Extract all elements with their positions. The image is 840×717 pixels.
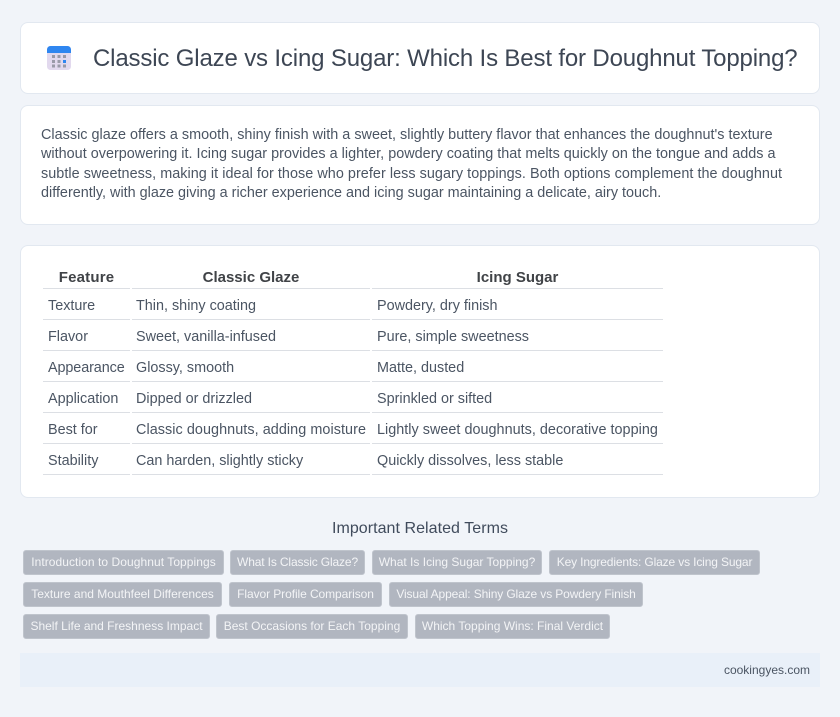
panel: header xyxy=(20,22,820,94)
tag: What Is Classic Glaze? xyxy=(237,555,358,569)
table row: best for: Classic doughnuts, adding moisture xyxy=(136,422,366,438)
table row: stability: Quickly dissolves, less stable xyxy=(377,453,563,469)
tag: Key Ingredients: Glaze vs Icing Sugar xyxy=(557,555,752,569)
tag xyxy=(372,550,542,575)
panel: description xyxy=(20,105,820,225)
tag: Which Topping Wins: Final Verdict xyxy=(422,619,603,633)
table row: flavor xyxy=(48,329,529,345)
table row: appearance: Glossy, smooth xyxy=(136,360,234,376)
text block: description: without overpowering it. Icing sugar provides a lighter, powdery coating that melts quickly on the tongue and adds a xyxy=(41,146,776,162)
title: Classic Glaze vs Icing Sugar: Which Is Best for Doughnut Topping? xyxy=(93,45,798,72)
table header: icing sugar: Icing Sugar xyxy=(477,269,558,286)
table row: texture: Powdery, dry finish xyxy=(377,298,498,314)
table row: texture: Thin, shiny coating xyxy=(136,298,256,314)
table row: application: Dipped or drizzled xyxy=(136,391,252,407)
table row: texture xyxy=(48,298,498,314)
tag: Flavor Profile Comparison xyxy=(237,587,374,601)
panel: comparison table xyxy=(20,245,820,498)
table row: best for: Lightly sweet doughnuts, decorative topping xyxy=(377,422,658,438)
tag xyxy=(389,582,643,607)
text block: description: Classic glaze offers a smooth, shiny finish with a sweet, slightly buttery flavor that enhances the doughnut's texture xyxy=(41,127,773,143)
table row: texture: Texture xyxy=(48,298,95,314)
table row: appearance xyxy=(48,360,464,376)
table row: best for xyxy=(48,422,658,438)
table row: flavor: Pure, simple sweetness xyxy=(377,329,529,345)
tag xyxy=(23,582,222,607)
heading: related terms: Important Related Terms xyxy=(332,520,508,537)
table row: flavor: Sweet, vanilla-infused xyxy=(136,329,276,345)
table row: stability xyxy=(48,453,563,469)
text block: description: differently, with glaze giving a richer experience and icing sugar maintaining a delicate, airy touch. xyxy=(41,185,661,201)
table row: application: Sprinkled or sifted xyxy=(377,391,492,407)
tag xyxy=(229,582,382,607)
tag: What Is Icing Sugar Topping? xyxy=(379,555,535,569)
icon: calendar xyxy=(47,46,71,70)
table header: feature: Feature xyxy=(59,269,114,286)
table row: application: Application xyxy=(48,391,118,407)
tag: Best Occasions for Each Topping xyxy=(224,619,400,633)
text block: description xyxy=(41,127,782,201)
text block: description: subtle sweetness, making it ideal for those who prefer less sugary toppings. Both options complement the doughnut xyxy=(41,166,782,182)
tag: Introduction to Doughnut Toppings xyxy=(31,555,216,569)
footer credit: cookingyes.com xyxy=(724,663,810,677)
tag list: related terms xyxy=(23,550,760,639)
table row: appearance: Matte, dusted xyxy=(377,360,464,376)
tag xyxy=(230,550,365,575)
table header: classic glaze: Classic Glaze xyxy=(203,269,299,286)
tag xyxy=(549,550,760,575)
table row: application xyxy=(48,391,492,407)
table row: best for: Best for xyxy=(48,422,98,438)
table row: flavor: Flavor xyxy=(48,329,88,345)
footer xyxy=(20,653,820,687)
tag xyxy=(415,614,610,639)
table row: stability: Can harden, slightly sticky xyxy=(136,453,303,469)
tag: Visual Appeal: Shiny Glaze vs Powdery Finish xyxy=(396,587,636,601)
tag xyxy=(23,550,224,575)
tag: Shelf Life and Freshness Impact xyxy=(30,619,203,633)
tag: Texture and Mouthfeel Differences xyxy=(31,587,214,601)
tag xyxy=(216,614,408,639)
tag xyxy=(23,614,210,639)
table row: stability: Stability xyxy=(48,453,98,469)
table row: appearance: Appearance xyxy=(48,360,125,376)
